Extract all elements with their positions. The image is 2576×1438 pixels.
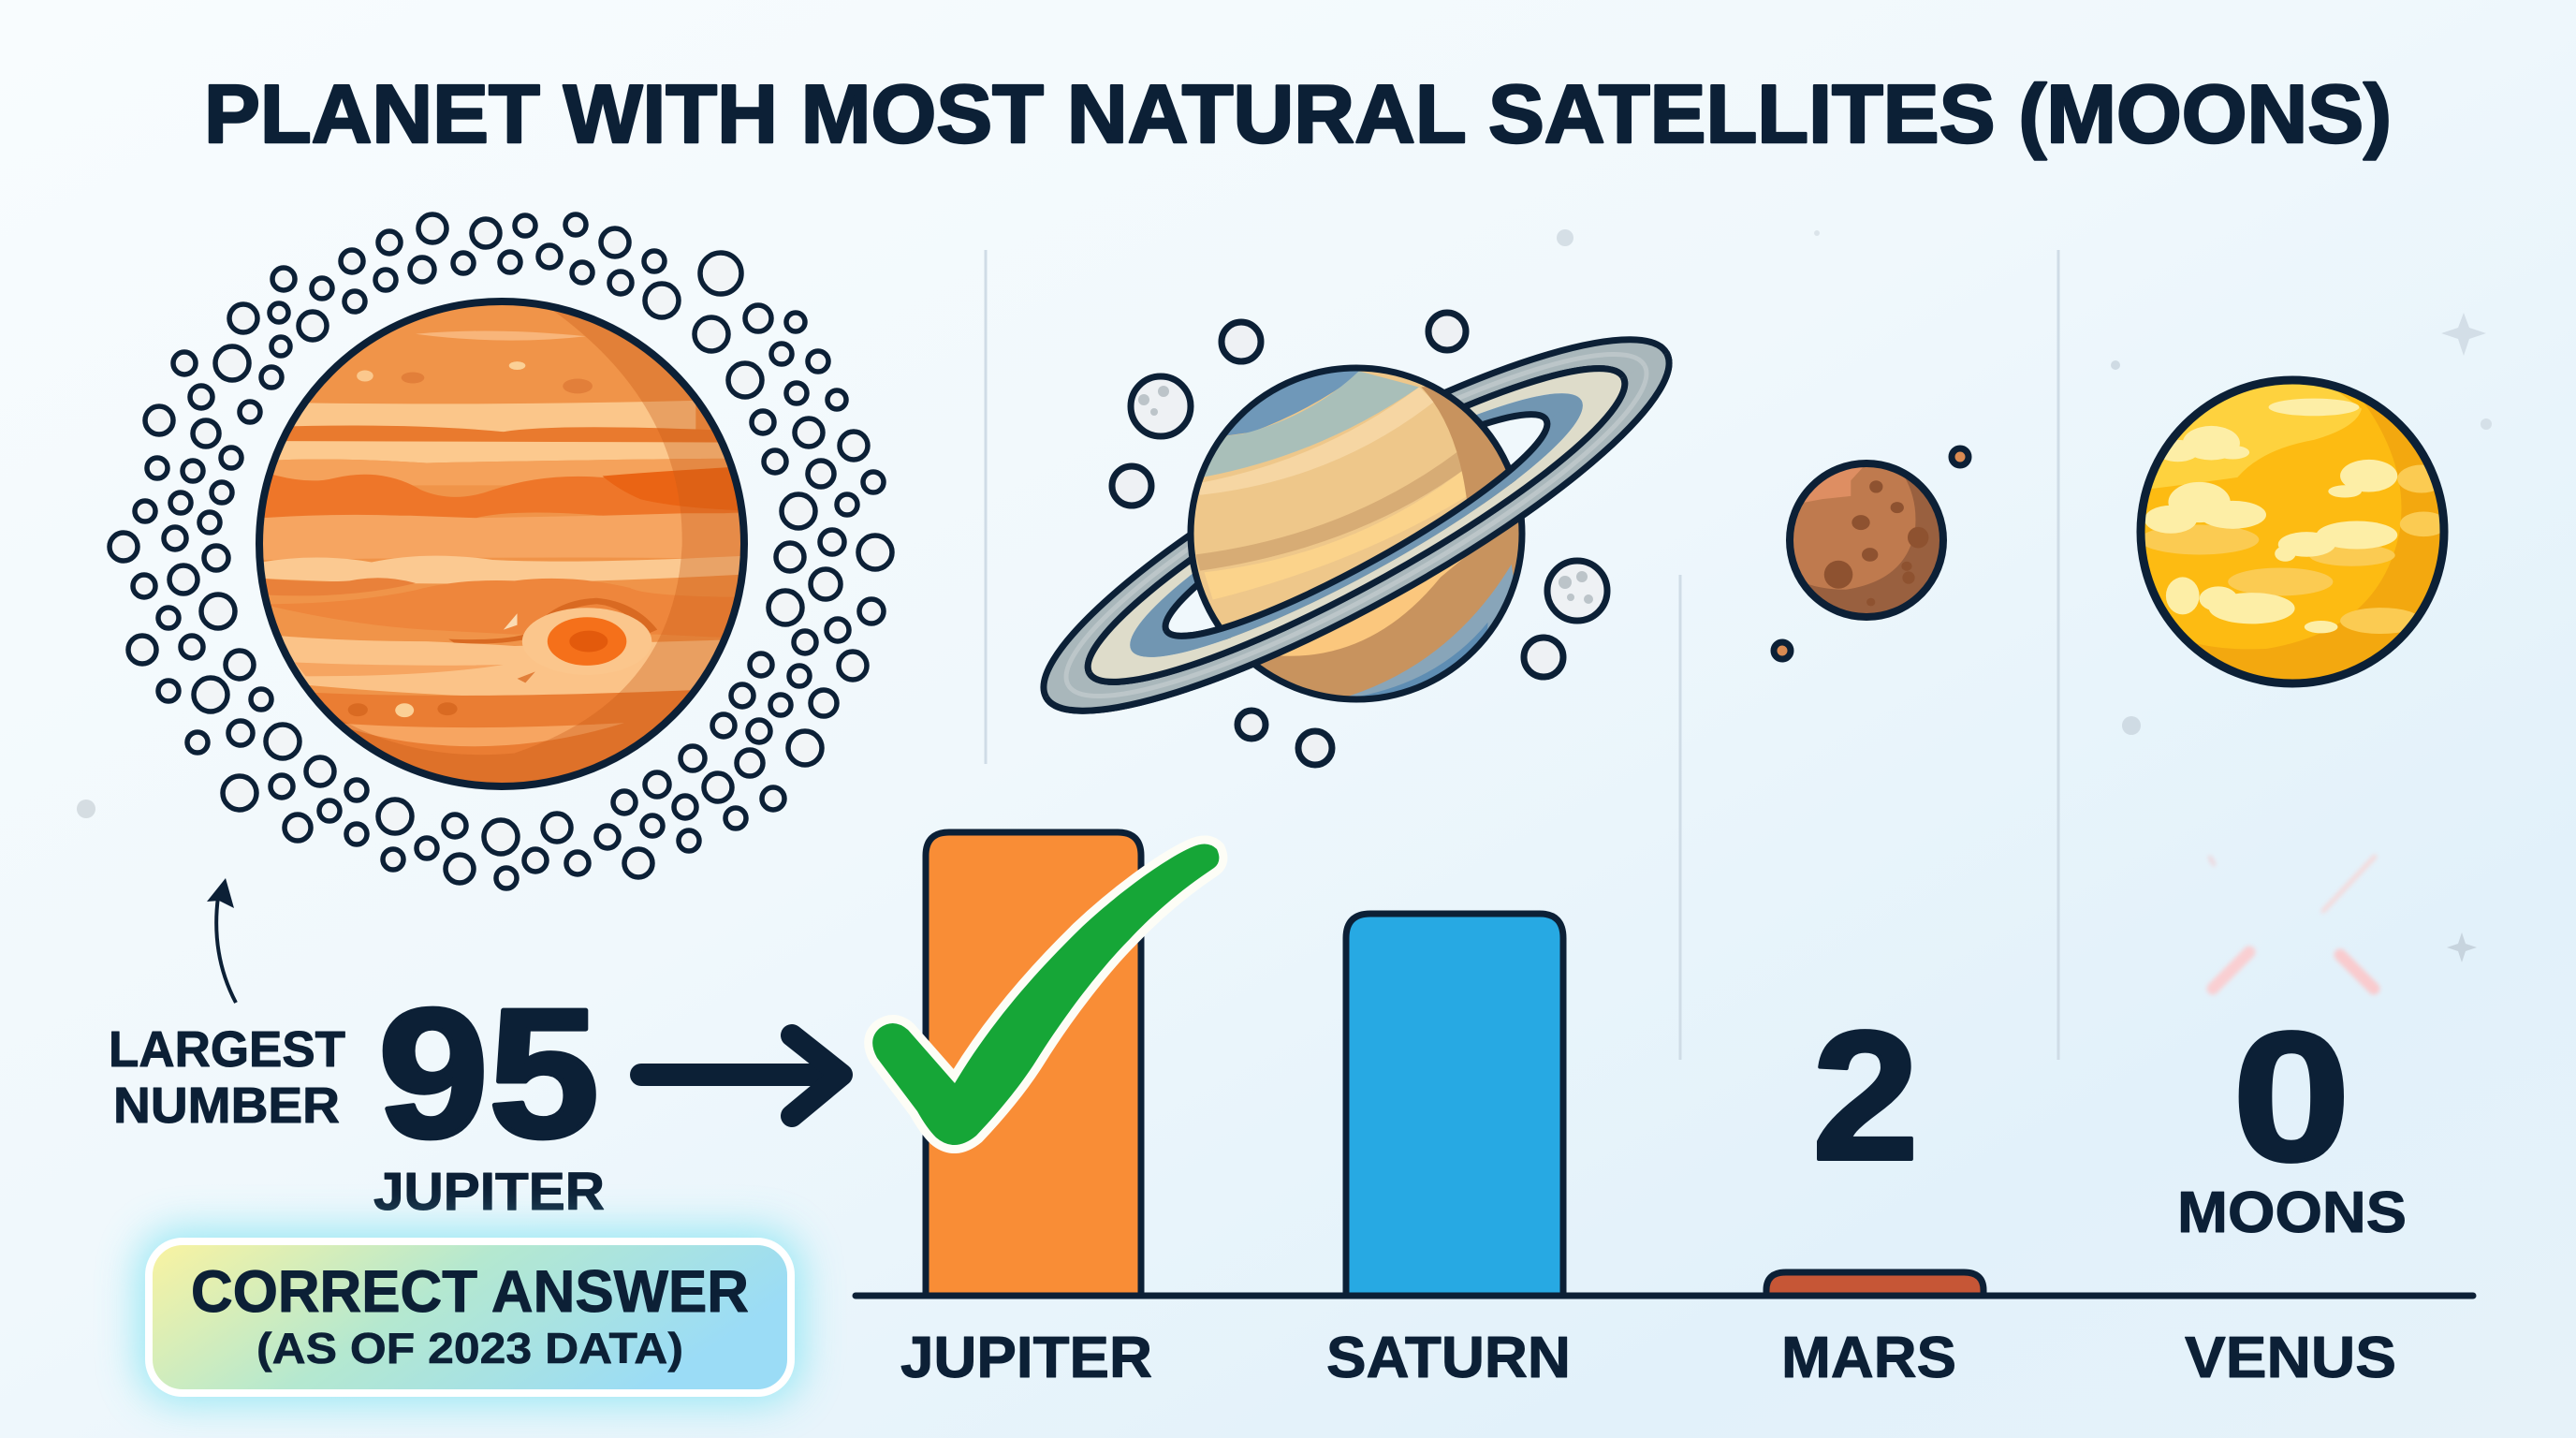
label: largest number: LARGEST — [109, 1021, 345, 1078]
badge: correct answer: (AS OF 2023 DATA) — [256, 1324, 683, 1372]
bar chart — [856, 832, 2473, 1296]
label: largest number — [109, 1021, 345, 1134]
axis labels: SATURN — [1326, 1326, 1571, 1390]
arrow from 95 to bar — [641, 1035, 842, 1116]
label: largest number: NUMBER — [113, 1078, 340, 1134]
label: moons: MOONS — [2177, 1181, 2407, 1245]
icon: green check mark — [872, 844, 1219, 1145]
faint background specks and sparkles — [77, 229, 2492, 1060]
axis labels: VENUS — [2185, 1326, 2396, 1390]
mars moons — [1774, 448, 1969, 659]
title: PLANET WITH MOST NATURAL SATELLITES (MOONS) — [204, 67, 2392, 160]
label: jupiter under number: JUPITER — [373, 1162, 605, 1222]
icon: jupiter planet — [251, 294, 756, 798]
number: jupiter 95: 95 — [378, 971, 599, 1176]
axis labels — [900, 1326, 2396, 1390]
axis line — [856, 1292, 2473, 1299]
icon: venus planet — [2132, 374, 2457, 693]
bar: jupiter — [926, 832, 1141, 1296]
value: venus 0: 0 — [2232, 994, 2350, 1199]
bar: mars — [1766, 1272, 1983, 1296]
jupiter moons ring — [110, 214, 892, 888]
icon: saturn planet with rings — [1040, 336, 1673, 714]
saturn moons — [1112, 313, 1607, 765]
badge: correct answer — [139, 1230, 801, 1402]
curved arrow pointing to jupiter — [207, 878, 236, 1003]
axis labels: MARS — [1781, 1326, 1956, 1390]
badge: correct answer: CORRECT ANSWER — [191, 1259, 749, 1325]
icon: mars planet — [1784, 459, 1956, 624]
axis labels: JUPITER — [900, 1326, 1152, 1390]
bar: saturn — [1346, 914, 1563, 1296]
value: mars 2: 2 — [1812, 993, 1919, 1198]
